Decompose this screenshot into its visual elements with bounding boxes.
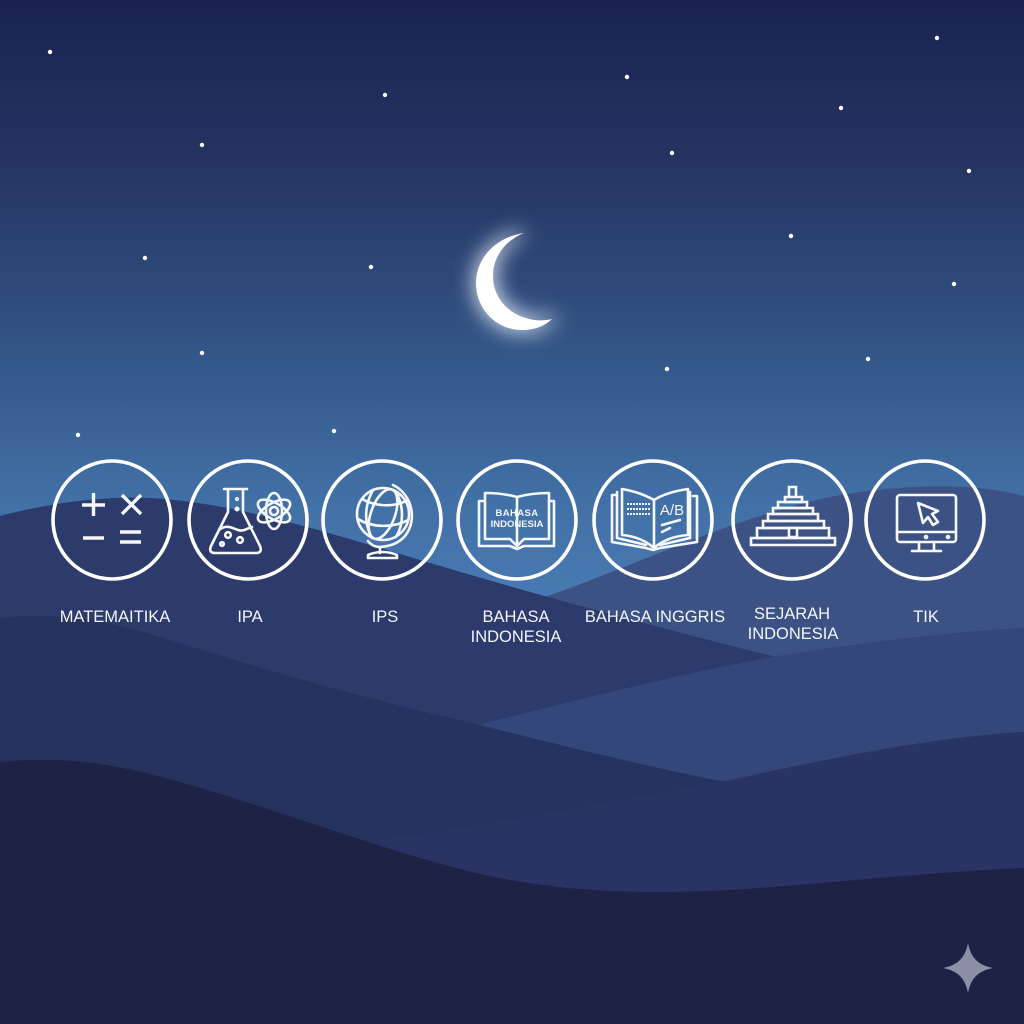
subject: Matematika bbox=[53, 461, 171, 626]
moon: crescent bbox=[476, 233, 552, 330]
hill: front left bbox=[0, 760, 1024, 1024]
label: IPA: IPA bbox=[237, 608, 263, 626]
hill: back right bbox=[545, 486, 1024, 760]
icon ring: Bahasa Inggris bbox=[594, 461, 712, 579]
label: IPS: IPS bbox=[372, 608, 398, 626]
subject: TIK bbox=[866, 461, 984, 626]
hill: front right bbox=[380, 732, 1024, 1024]
subject: Sejarah Indonesia bbox=[733, 461, 851, 643]
book text: A/B: A/B bbox=[660, 502, 684, 519]
label: Bahasa Inggris: BAHASA INGGRIS bbox=[585, 608, 725, 626]
label: TIK: TIK bbox=[913, 608, 939, 626]
book text: Bahasa Indonesia: BAHASA bbox=[495, 508, 539, 519]
label line 2: INDONESIA bbox=[471, 628, 561, 646]
icon ring: Sejarah Indonesia bbox=[733, 461, 851, 579]
subject: IPS bbox=[323, 461, 441, 626]
icon: open book bbox=[479, 493, 554, 549]
label: Sejarah Indonesia: SEJARAH bbox=[754, 605, 830, 623]
moon glow bbox=[476, 233, 552, 330]
hill: back left bbox=[0, 498, 780, 780]
icon: monitor with cursor bbox=[897, 495, 956, 551]
subject: IPA bbox=[189, 461, 307, 626]
hill: middle left bbox=[0, 616, 725, 900]
hill: middle right bbox=[400, 628, 1024, 860]
icon: flask and atom bbox=[210, 489, 294, 553]
subject: Bahasa Inggris bbox=[585, 461, 725, 626]
icon: math operators bbox=[82, 493, 141, 542]
icon: globe bbox=[357, 485, 412, 558]
icon ring: IPS bbox=[323, 461, 441, 579]
book text line 2: INDONESIA bbox=[491, 519, 544, 530]
label line 2: INDONESIA bbox=[748, 625, 838, 643]
label: Matematika: MATEMAITIKA bbox=[60, 608, 170, 626]
icon ring: IPA bbox=[189, 461, 307, 579]
label: Bahasa Indonesia: BAHASA bbox=[483, 608, 549, 626]
subject: Bahasa Indonesia bbox=[458, 461, 576, 646]
icon ring: Matematika bbox=[53, 461, 171, 579]
sky background bbox=[0, 0, 1024, 640]
icon: Borobudur temple bbox=[751, 487, 835, 545]
icon ring: Bahasa Indonesia bbox=[458, 461, 576, 579]
sparkle icon bbox=[943, 943, 993, 993]
icon: open book with A/B bbox=[612, 489, 697, 550]
stars bbox=[48, 36, 971, 437]
icon ring: TIK bbox=[866, 461, 984, 579]
